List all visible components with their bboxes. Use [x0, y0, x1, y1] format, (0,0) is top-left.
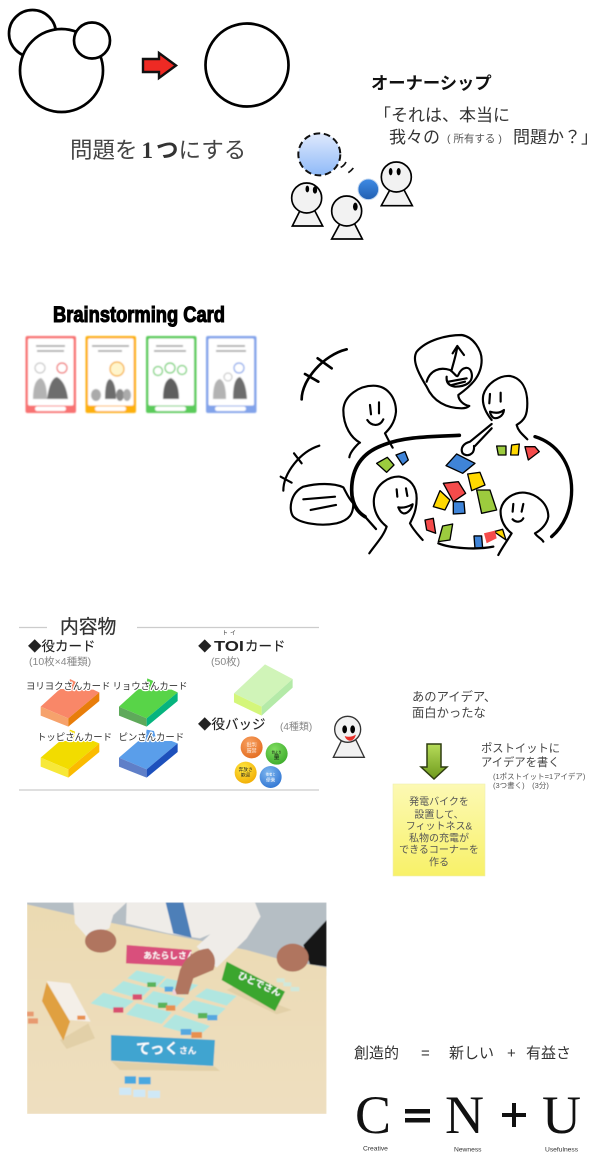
stack: TOI	[234, 664, 293, 716]
heading: make it one problem: 問題を1つにする	[70, 138, 246, 163]
illustration: hand-drawn brainstorming group	[281, 335, 572, 555]
text block: that idea was interesting	[412, 689, 496, 720]
heading: role badges: ◆役バッジ	[198, 717, 266, 732]
note: post-it rules: (1ポストイット=1アイデア)	[493, 771, 586, 781]
labels: formula terms: Newness	[454, 1146, 482, 1154]
formula: C = N + U: U	[542, 1085, 581, 1145]
post-it note: idea: フィットネス&	[406, 820, 473, 832]
labels: four role card names: リョウさんカード	[112, 680, 188, 692]
note: badge count: (4種類)	[280, 720, 312, 733]
speech bubble: left with lines	[291, 484, 353, 525]
labels: four role card names: トッピさんカード	[37, 732, 112, 742]
heading: contents: 内容物	[60, 616, 116, 637]
speech bubble: idea arrow and hands	[415, 335, 482, 408]
photo: people playing card game on table	[27, 902, 327, 1114]
badge: green: 質より	[272, 749, 282, 754]
person: bottom center	[369, 477, 423, 553]
formula: Japanese: =	[421, 1045, 430, 1062]
post-it note: idea: 作る	[429, 856, 449, 868]
card: red	[26, 336, 76, 413]
badge: blue	[260, 766, 282, 788]
person: left	[292, 183, 323, 226]
labels: formula terms: Usefulness	[545, 1146, 579, 1154]
frame lines	[19, 628, 319, 790]
badge: yellow: 歓迎	[241, 771, 251, 778]
wall	[27, 902, 326, 968]
labels: four role card names: ヨリヨクさんカード	[26, 680, 110, 692]
sign: pink: あたらしさん	[143, 950, 196, 960]
pointing hand	[175, 948, 215, 994]
sign: pink	[126, 945, 196, 967]
panel: brainstorming cards	[26, 336, 256, 413]
sign: blue: てっくさん	[136, 1042, 197, 1058]
icon: thought marks	[341, 162, 353, 173]
badge: orange: 批判	[247, 742, 257, 749]
note: TOI card count: (50枚)	[211, 655, 240, 668]
text block: ownership question: 我々の	[389, 128, 440, 147]
stitched arc left	[281, 446, 319, 491]
sign: green	[222, 962, 285, 1011]
post-it note: idea: できるコーナーを	[399, 844, 479, 856]
person: smiling thinker	[333, 716, 364, 757]
card: orange	[86, 336, 136, 413]
stack: blue	[119, 730, 178, 778]
badge: yellow	[235, 762, 257, 784]
person: speaking top right	[462, 376, 527, 455]
tie	[166, 902, 192, 938]
note: post-it rules	[493, 771, 586, 790]
labels: four role card names	[26, 680, 188, 742]
badge: blue: 便乗	[266, 777, 276, 784]
table shadows	[60, 987, 292, 1071]
heading: TOI cards	[198, 638, 286, 655]
person: right	[381, 162, 412, 206]
post-it note: idea: 設置して、	[414, 809, 464, 821]
heading: TOI cards: カード	[245, 639, 286, 654]
dark sleeve	[303, 920, 327, 967]
text block: ownership question	[374, 106, 598, 147]
note: post-it rules: (3つ書く) (3分)	[493, 780, 549, 790]
sign: green: ひとでさん	[236, 970, 283, 998]
sign: blue	[111, 1035, 215, 1066]
stack: yellow	[41, 730, 99, 778]
heading: Brainstorming Card: Brainstorming Card	[53, 302, 225, 327]
formula: Japanese	[354, 1045, 571, 1062]
post-it note: idea	[393, 784, 485, 876]
stack: orange	[41, 679, 99, 727]
cards on table	[91, 970, 237, 1037]
stack: green	[119, 678, 178, 727]
text block: write ideas on post-its: ポストイットに	[481, 742, 560, 755]
icon: red arrow	[143, 53, 176, 78]
icon: blue ball	[358, 179, 379, 200]
heading: TOI cards: ◆	[198, 639, 212, 654]
labels: formula terms: Creative	[363, 1146, 388, 1152]
post-it note: idea: 私物の充電が	[409, 832, 469, 844]
table top	[27, 904, 327, 1114]
labels: four role card names: ピンさんカード	[118, 732, 184, 742]
post-it note: idea: 発電バイクを	[409, 795, 469, 808]
heading: role cards: ◆役カード	[28, 639, 96, 654]
person: middle	[332, 196, 362, 239]
card: green	[146, 336, 196, 413]
heading: ownership: オーナーシップ	[371, 73, 492, 93]
formula: Japanese: 新しい	[449, 1045, 494, 1062]
panel: contents	[19, 616, 319, 790]
badges	[235, 736, 288, 788]
table outline	[352, 435, 572, 548]
hands	[85, 929, 309, 972]
card stacks	[41, 664, 293, 778]
formula: C = N + U: N	[445, 1085, 484, 1145]
formula: C = N + U	[355, 1085, 581, 1145]
text block: that idea was interesting: 面白かったな	[412, 705, 486, 720]
stitched arc top	[302, 349, 347, 399]
text block: ownership question: ( 所有する )	[447, 132, 502, 145]
text block: write ideas on post-its: アイデアを書く	[481, 755, 560, 769]
badge: yellow: 奔放さ	[239, 766, 253, 773]
person: smiling left	[343, 386, 396, 457]
card: blue	[206, 336, 256, 413]
text block: write ideas on post-its	[481, 742, 560, 769]
labels: formula terms	[363, 1146, 579, 1154]
badge: orange	[241, 736, 263, 758]
person: bottom right	[498, 493, 548, 555]
badge: green	[266, 743, 288, 765]
diagram: three overlapping problem circles	[9, 10, 110, 112]
sign: orange tent	[42, 981, 91, 1041]
formula: Japanese: 有益さ	[526, 1045, 571, 1062]
illustration: people and the owned problem	[292, 133, 412, 239]
text block: that idea was interesting: あのアイデア、	[412, 689, 496, 704]
formula: C = N + U: C	[355, 1085, 391, 1145]
note: role card count: (10枚×4種類)	[29, 655, 91, 668]
shirt	[73, 902, 261, 968]
badge: orange: 厳禁	[247, 747, 257, 754]
ruby: TOI reading: トイ	[222, 631, 238, 637]
icon: green down arrow	[421, 744, 447, 779]
formula: Japanese: +	[507, 1045, 516, 1062]
diagram: single circle	[206, 24, 288, 106]
sticky cards on the table	[377, 444, 539, 548]
heading: TOI cards: TOI	[214, 638, 244, 655]
formula: Japanese: 創造的	[354, 1045, 399, 1062]
text block: ownership question: 問題か？」	[513, 128, 598, 147]
badge: green: 量	[274, 754, 280, 761]
badge: blue: 他者と	[266, 772, 276, 777]
icon: dashed problem bubble	[298, 133, 340, 175]
text block: ownership question: 「それは、本当に	[374, 106, 510, 125]
small tokens	[27, 978, 299, 1098]
